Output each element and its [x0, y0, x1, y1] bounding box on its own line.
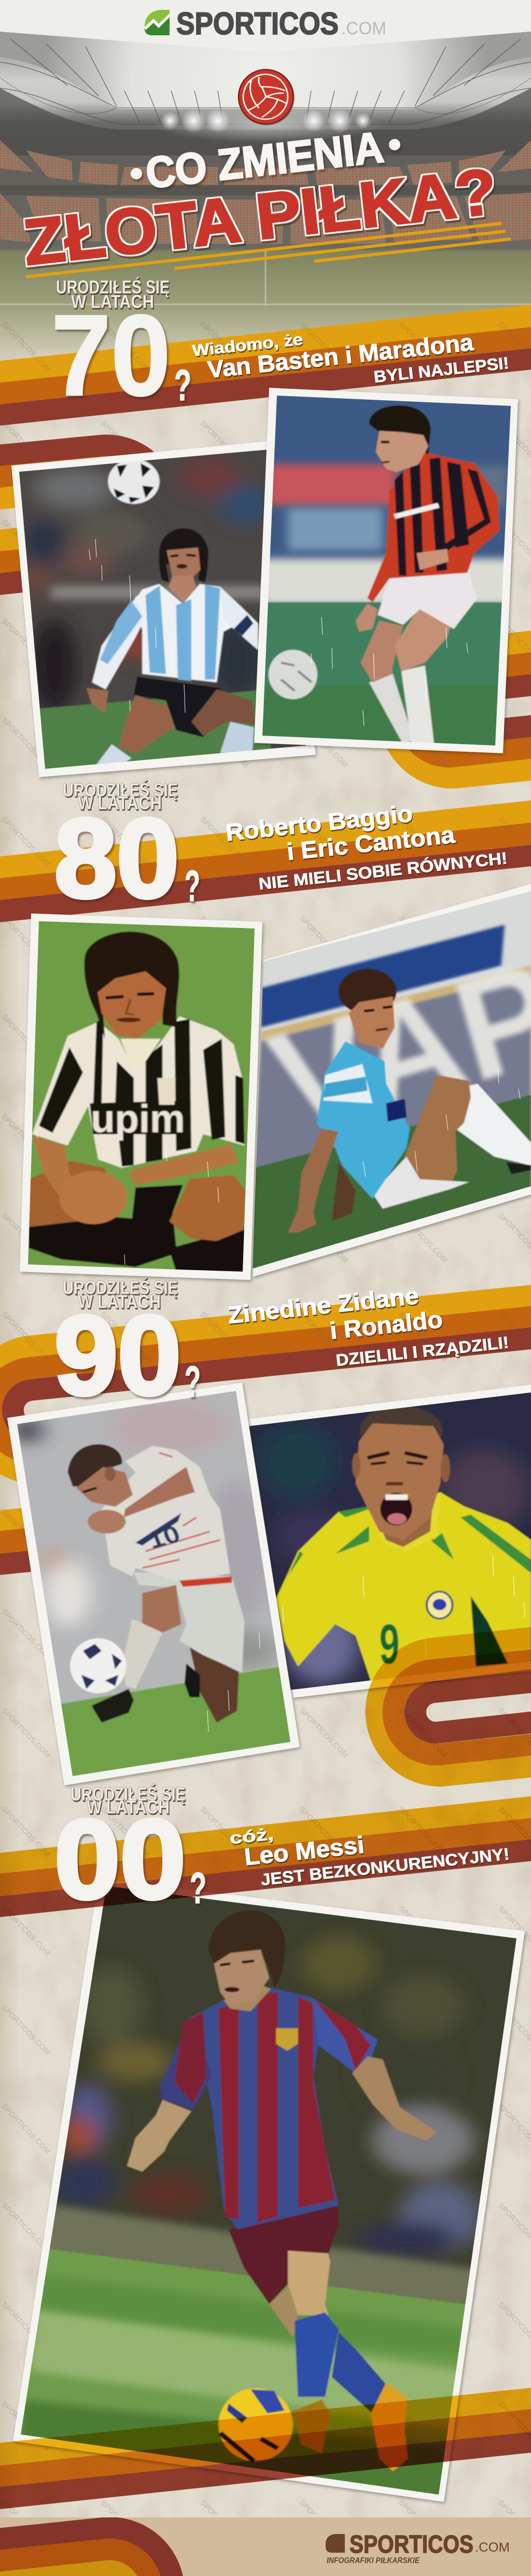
head [159, 528, 208, 583]
born in decade label: URODZIŁEŚ SIĘ [56, 276, 170, 298]
band text: BYLI NAJLEPSI! [373, 354, 510, 386]
top logo: .COM [341, 19, 386, 38]
legs and hand [119, 695, 174, 754]
dark side roof [0, 88, 531, 156]
shirt [32, 1016, 245, 1168]
head [369, 405, 431, 455]
footer retro curve [0, 2528, 174, 2576]
born in decade label: URODZIŁEŚ SIĘ [63, 1276, 178, 1298]
legs [361, 621, 403, 682]
born in decade label: URODZIŁEŚ SIĘ [63, 779, 178, 800]
title line 2: zlota pilka: ZŁOTA PIŁKA? [20, 156, 500, 279]
icon: sporticos mark [145, 10, 170, 35]
born in decade label [71, 1783, 186, 1818]
neck [372, 1492, 440, 1551]
header band [0, 0, 531, 52]
photo: Baggio [17, 909, 274, 1280]
shirt [137, 583, 232, 683]
retro stripes left of Zidane [0, 1504, 62, 1575]
band text: i Ronaldo [329, 1305, 444, 1344]
film scratches over photos [36, 539, 525, 2405]
ball [70, 1638, 127, 1693]
floodlights [150, 106, 384, 143]
section 70s labels [51, 276, 510, 420]
shirt [276, 1492, 531, 1686]
retro curve left of Maradona [0, 445, 170, 622]
footer logo: .COM [475, 2540, 510, 2555]
top logo: SPORTICOS [176, 6, 339, 41]
photo: Maradona [0, 441, 339, 778]
photo: Ronaldo: 9 [379, 1613, 400, 1676]
shorts [134, 677, 220, 737]
band text: JEST BEZKONKURENCYJNY! [260, 1845, 510, 1889]
number 70: ? [174, 361, 191, 410]
born in decade label [63, 1276, 178, 1312]
number 00: 00 [54, 1796, 186, 1922]
band text: cóż, [229, 1824, 274, 1848]
footer panel [0, 2517, 531, 2576]
band text: DZIELILI I RZĄDZILI! [335, 1333, 510, 1370]
front leg [288, 2242, 330, 2315]
legs [29, 1161, 115, 1227]
born in decade label: W LATACH [71, 291, 154, 312]
born in decade label: W LATACH [78, 1291, 161, 1312]
shirt [317, 1041, 410, 1199]
number 70: 70 [51, 291, 171, 420]
ball [269, 650, 317, 699]
band text: Zinedine Zidane [227, 1282, 420, 1329]
decade band 00s over photo [0, 1796, 531, 1917]
born in decade label [63, 779, 178, 813]
arms [32, 1136, 88, 1199]
number 00: ? [190, 1864, 206, 1912]
roof structure [0, 39, 531, 124]
band text [225, 799, 508, 893]
decade band 90s with curve [0, 1296, 531, 1473]
legs [455, 1083, 531, 1166]
band text: i Eric Cantona [286, 821, 456, 865]
stadium upper stands [0, 140, 531, 187]
forearm and hand [123, 1467, 195, 1517]
born in decade label: URODZIŁEŚ SIĘ [71, 1783, 186, 1805]
head [84, 932, 179, 1039]
t-shirt [120, 1039, 161, 1077]
footer logo: SPORTICOS [350, 2531, 473, 2558]
number 90: ? [185, 1357, 201, 1406]
shorts [378, 573, 478, 629]
band text [229, 1824, 510, 1889]
icon: red football badge [239, 69, 294, 124]
far leg and boot [190, 1646, 239, 1723]
shirt [368, 452, 499, 602]
band text: Van Basten i Maradona [206, 328, 475, 383]
retro curve right of van Basten [389, 641, 531, 778]
front arm [288, 1129, 339, 1233]
section 80s labels [54, 779, 508, 921]
photo: Messi [0, 1878, 531, 2554]
born in decade label: W LATACH [87, 1796, 170, 1818]
shirt [191, 1988, 339, 2229]
concourse band [0, 185, 531, 195]
crest and number [427, 1592, 452, 1618]
decade band 80s [0, 800, 531, 922]
shorts [372, 1157, 469, 1209]
photo: Baggio: upim [91, 1096, 185, 1141]
stadium lower stands [0, 193, 531, 244]
head [68, 1444, 122, 1486]
photo: van Basten [254, 385, 525, 778]
lower body dark [29, 1185, 245, 1272]
head [223, 1986, 271, 2011]
band text: Leo Messi [243, 1831, 366, 1870]
head [339, 969, 396, 1014]
born in decade label [56, 276, 170, 312]
back leg [269, 2287, 298, 2338]
gold title underlines [26, 223, 511, 277]
pitch lines [0, 251, 531, 306]
arms [352, 2057, 437, 2141]
number 80: 80 [54, 795, 179, 921]
ball [108, 459, 160, 504]
shorts [134, 1572, 245, 1672]
band text: NIE MIELI SOBIE RÓWNYCH! [258, 849, 508, 893]
born in decade label: W LATACH [78, 792, 162, 813]
photo: Zidane [0, 1383, 322, 1804]
rear arm [332, 1162, 356, 1221]
section 00s labels [54, 1783, 510, 1922]
decade band 70s [0, 305, 531, 426]
retro curve over Ronaldo [376, 1638, 531, 1776]
section 90s labels [54, 1276, 510, 1418]
grass [20, 2200, 481, 2329]
photo: Ronaldo [237, 1383, 531, 1720]
band text: Roberto Baggio [225, 799, 414, 846]
number 80: ? [185, 862, 200, 910]
sky and roof opening [0, 32, 531, 109]
ball [218, 2388, 293, 2461]
socks [369, 674, 414, 744]
front leg [142, 1585, 181, 1632]
photo: Zidane: 10 [144, 1520, 184, 1554]
photo: Cantona [237, 881, 531, 1303]
bottom band over photo [0, 2388, 531, 2509]
shirt [102, 1446, 230, 1581]
band text [227, 1282, 510, 1370]
footer logo: INFOGRAFIKI PIŁKARSKIE [327, 2556, 420, 2565]
shorts [229, 2200, 339, 2304]
band text: Wiadomo, że [191, 330, 304, 360]
head [360, 1406, 443, 1455]
stadium background [0, 32, 531, 381]
footer logo [326, 2531, 510, 2565]
number 90: 90 [54, 1292, 181, 1418]
title line 1: co zmienia: CO ZMIENIA [144, 122, 386, 198]
